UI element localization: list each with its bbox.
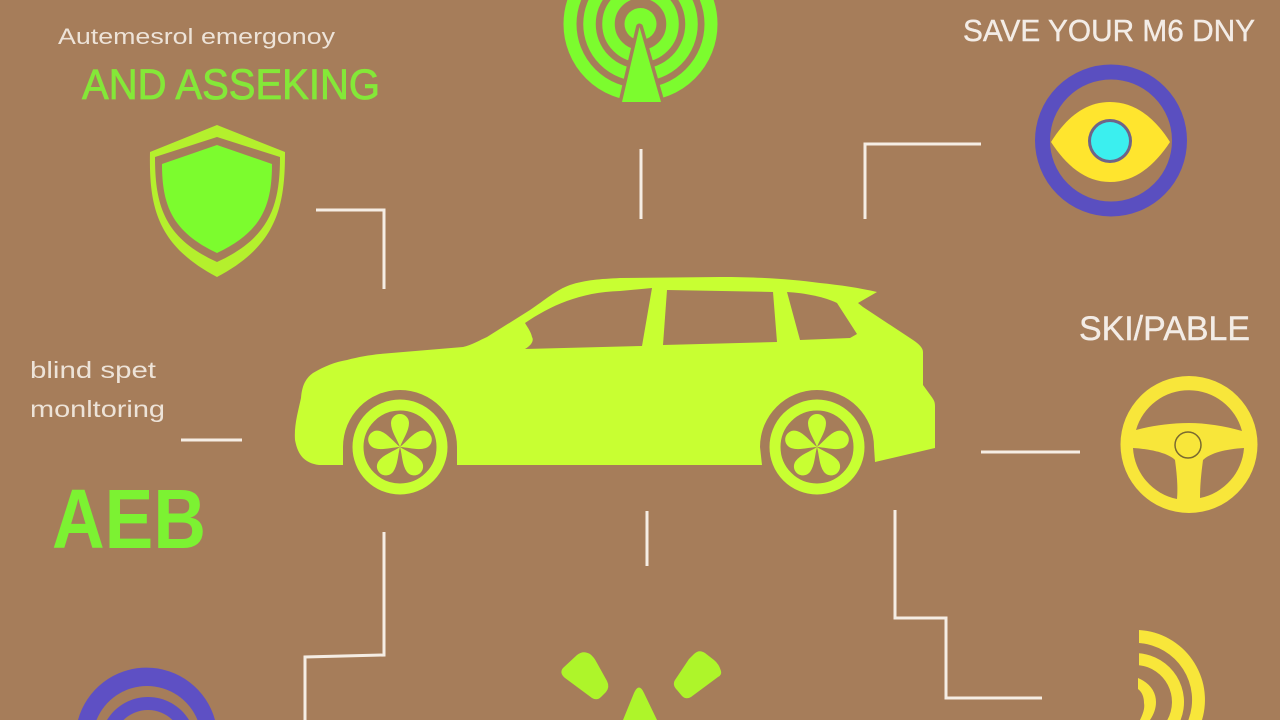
car middle window bbox=[663, 290, 777, 345]
text: save your money heading: SAVE YOUR M6 DNY bbox=[963, 13, 1255, 48]
car rear window bbox=[787, 292, 857, 340]
heading: AEB: AEB bbox=[52, 472, 206, 566]
car front window bbox=[525, 288, 652, 349]
car body bbox=[295, 277, 935, 465]
text: blind spot monitoring: monltoring bbox=[30, 396, 165, 422]
connector: top right elbow bbox=[865, 144, 981, 219]
icon: bottom centre radiating shapes bbox=[561, 651, 721, 720]
connector: left line bbox=[181, 438, 242, 442]
icon: eye in purple ring bbox=[1042, 72, 1180, 209]
heading: and assisting: AND ASSEKING bbox=[82, 61, 380, 109]
text: blind spot monitoring: blind spet bbox=[30, 357, 157, 383]
rear wheel bbox=[775, 405, 859, 489]
connector: bottom left elbow bbox=[305, 532, 384, 720]
icon: signal arcs bottom right bbox=[1138, 630, 1205, 720]
icon: purple arcs bottom left bbox=[78, 668, 215, 720]
icon: shield bbox=[150, 125, 285, 277]
connector: top centre line bbox=[640, 149, 642, 219]
connector: top left elbow bbox=[316, 210, 384, 289]
connector: right line bbox=[981, 450, 1080, 454]
icon: radio signal tower bbox=[570, 0, 711, 102]
connector: bottom right stepped line bbox=[895, 510, 1042, 698]
front wheel bbox=[358, 405, 442, 489]
car illustration bbox=[295, 277, 935, 489]
text: skippable label: SKI/PABLE bbox=[1079, 310, 1250, 348]
connector: bottom centre line bbox=[646, 511, 648, 566]
text: blind spot monitoring bbox=[30, 357, 165, 422]
icon: steering wheel bbox=[1120, 376, 1258, 513]
text: automatic emergency label: Autemesrol emergonoy bbox=[58, 24, 335, 49]
